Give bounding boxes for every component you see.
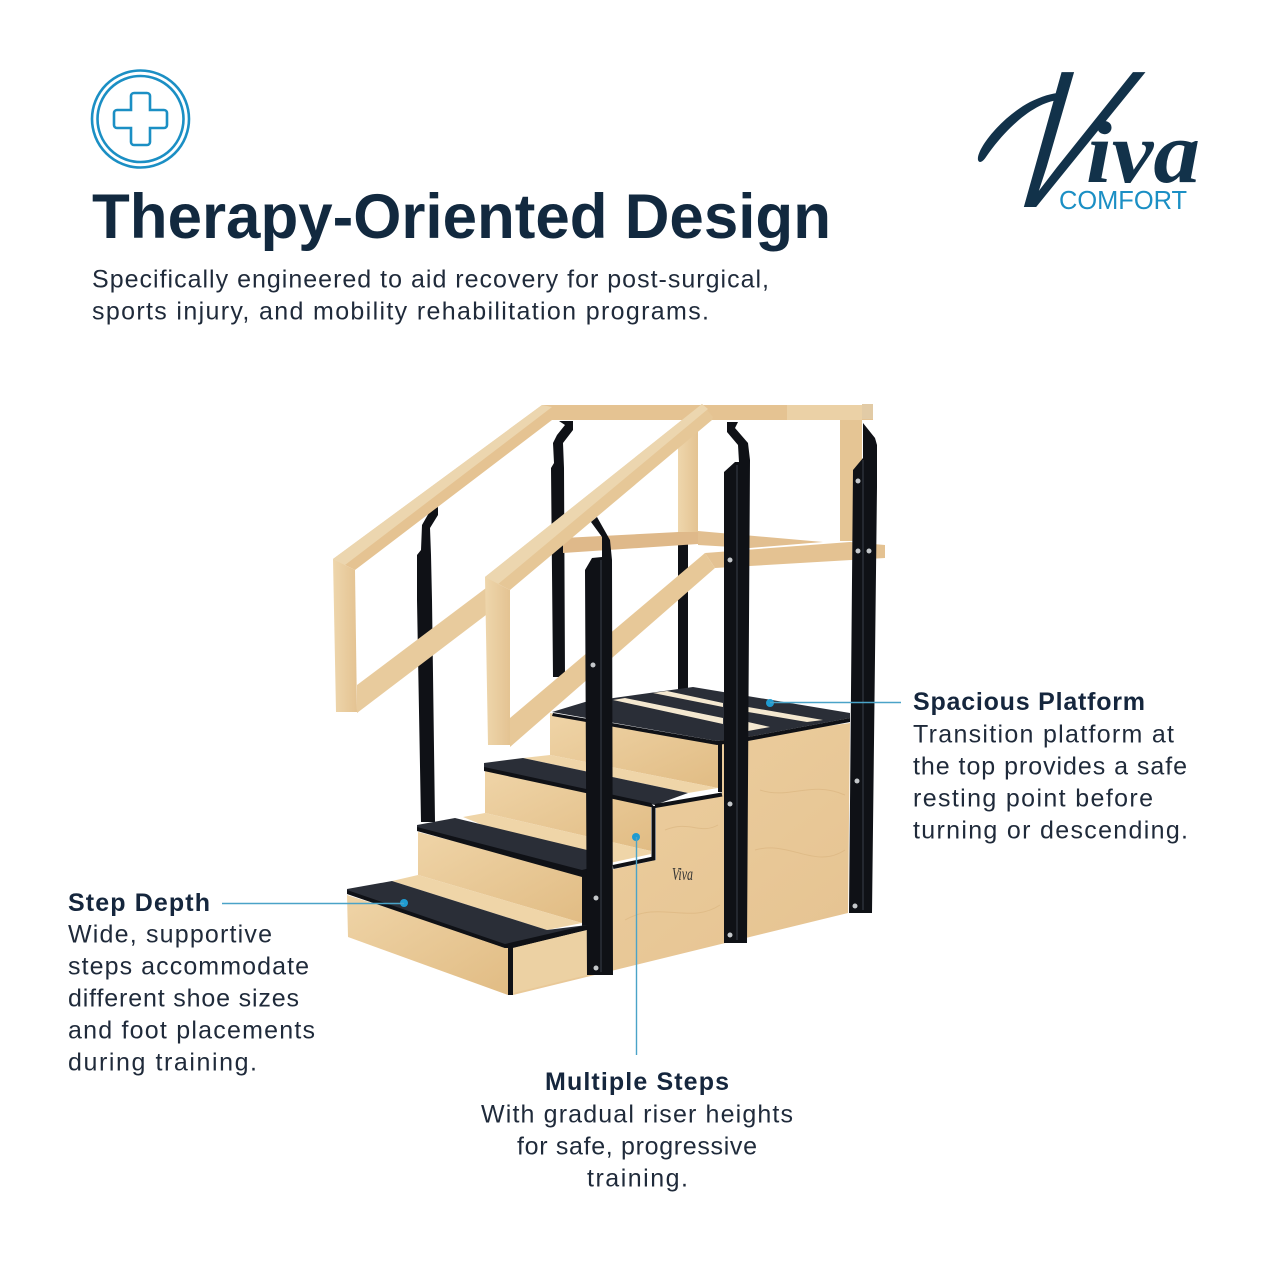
callout: Step Depth: Wide, supportive	[68, 920, 272, 948]
logo: Viva Comfort: iva	[1086, 105, 1200, 202]
subtitle: sports injury, and mobility rehabilitation programs.	[92, 298, 709, 326]
callout: Step Depth	[68, 889, 315, 1076]
icon: medical cross badge	[92, 70, 189, 168]
illustration: therapy stairs with handrails	[333, 404, 885, 995]
platform and steps	[347, 687, 850, 995]
platform top	[552, 687, 850, 741]
post bolts	[590, 478, 872, 970]
callout leader: Multiple Steps	[632, 833, 640, 1055]
title: Therapy-Oriented Design	[92, 182, 831, 252]
right lower rail	[705, 542, 885, 568]
callout: Multiple Steps: With gradual riser heights	[481, 1100, 793, 1128]
callout: Step Depth: steps accommodate	[68, 952, 309, 980]
left handrail	[333, 404, 873, 713]
callout leader: Spacious Platform	[766, 699, 901, 707]
logo: Viva Comfort: COMFORT	[1059, 185, 1187, 215]
second tread	[417, 818, 590, 874]
callout: Multiple Steps: for safe, progressive	[517, 1132, 757, 1160]
third tread	[484, 758, 688, 805]
callout leader: Step Depth	[222, 899, 408, 907]
callout: Step Depth: during training.	[68, 1048, 257, 1076]
callout: Spacious Platform	[913, 688, 1188, 844]
callout: Multiple Steps: Multiple Steps	[545, 1068, 729, 1096]
first step right face	[513, 930, 587, 993]
subtitle: Specifically engineered to aid recovery for post-surgical,	[92, 266, 769, 294]
front black posts	[585, 422, 877, 975]
top riser	[550, 713, 718, 788]
subtitle	[92, 266, 769, 326]
callout: Multiple Steps	[481, 1068, 793, 1192]
logo: Viva Comfort: V	[965, 30, 1169, 249]
post highlight lines	[601, 460, 863, 972]
callout: Spacious Platform: resting point before	[913, 784, 1153, 812]
first tread	[347, 881, 587, 948]
front handrail	[485, 404, 715, 747]
callout: Step Depth: and foot placements	[68, 1016, 315, 1044]
back horizontal rails	[563, 420, 862, 553]
side panel	[513, 723, 850, 995]
callout: Spacious Platform: the top provides a safe	[913, 752, 1187, 780]
first riser front	[347, 895, 508, 995]
callout: Step Depth: different shoe sizes	[68, 984, 299, 1012]
wood grain	[625, 789, 845, 920]
third riser	[485, 770, 651, 851]
back black posts	[417, 421, 688, 822]
brand mark on panel: Viva	[672, 864, 693, 884]
second riser	[418, 832, 582, 923]
callout: Multiple Steps: training.	[587, 1164, 688, 1192]
callout: Spacious Platform: Transition platform at	[913, 720, 1174, 748]
callout: Spacious Platform: Spacious Platform	[913, 688, 1145, 716]
callout: Step Depth: Step Depth	[68, 889, 210, 917]
callout: Spacious Platform: turning or descending.	[913, 816, 1188, 844]
